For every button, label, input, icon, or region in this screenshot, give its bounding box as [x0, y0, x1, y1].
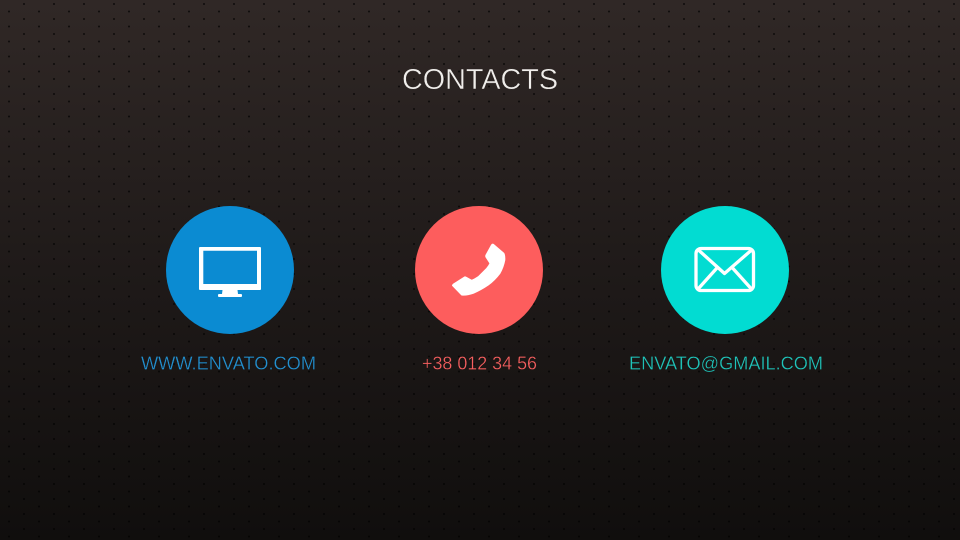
label: phone: +38 012 34 56	[422, 354, 537, 374]
icon circle: email	[661, 206, 789, 334]
title: CONTACTS	[402, 64, 558, 96]
panel: phone	[415, 206, 543, 374]
icon: monitor	[199, 247, 261, 297]
icon circle: website	[166, 206, 294, 334]
panel: email	[629, 206, 823, 374]
label: website: WWW.ENVATO.COM	[141, 354, 316, 374]
icon: phone handset	[452, 244, 505, 295]
icon circle: phone	[415, 206, 543, 334]
panel: website	[141, 206, 316, 374]
icon: envelope	[696, 248, 754, 290]
label: email: ENVATO@GMAIL.COM	[629, 354, 823, 374]
